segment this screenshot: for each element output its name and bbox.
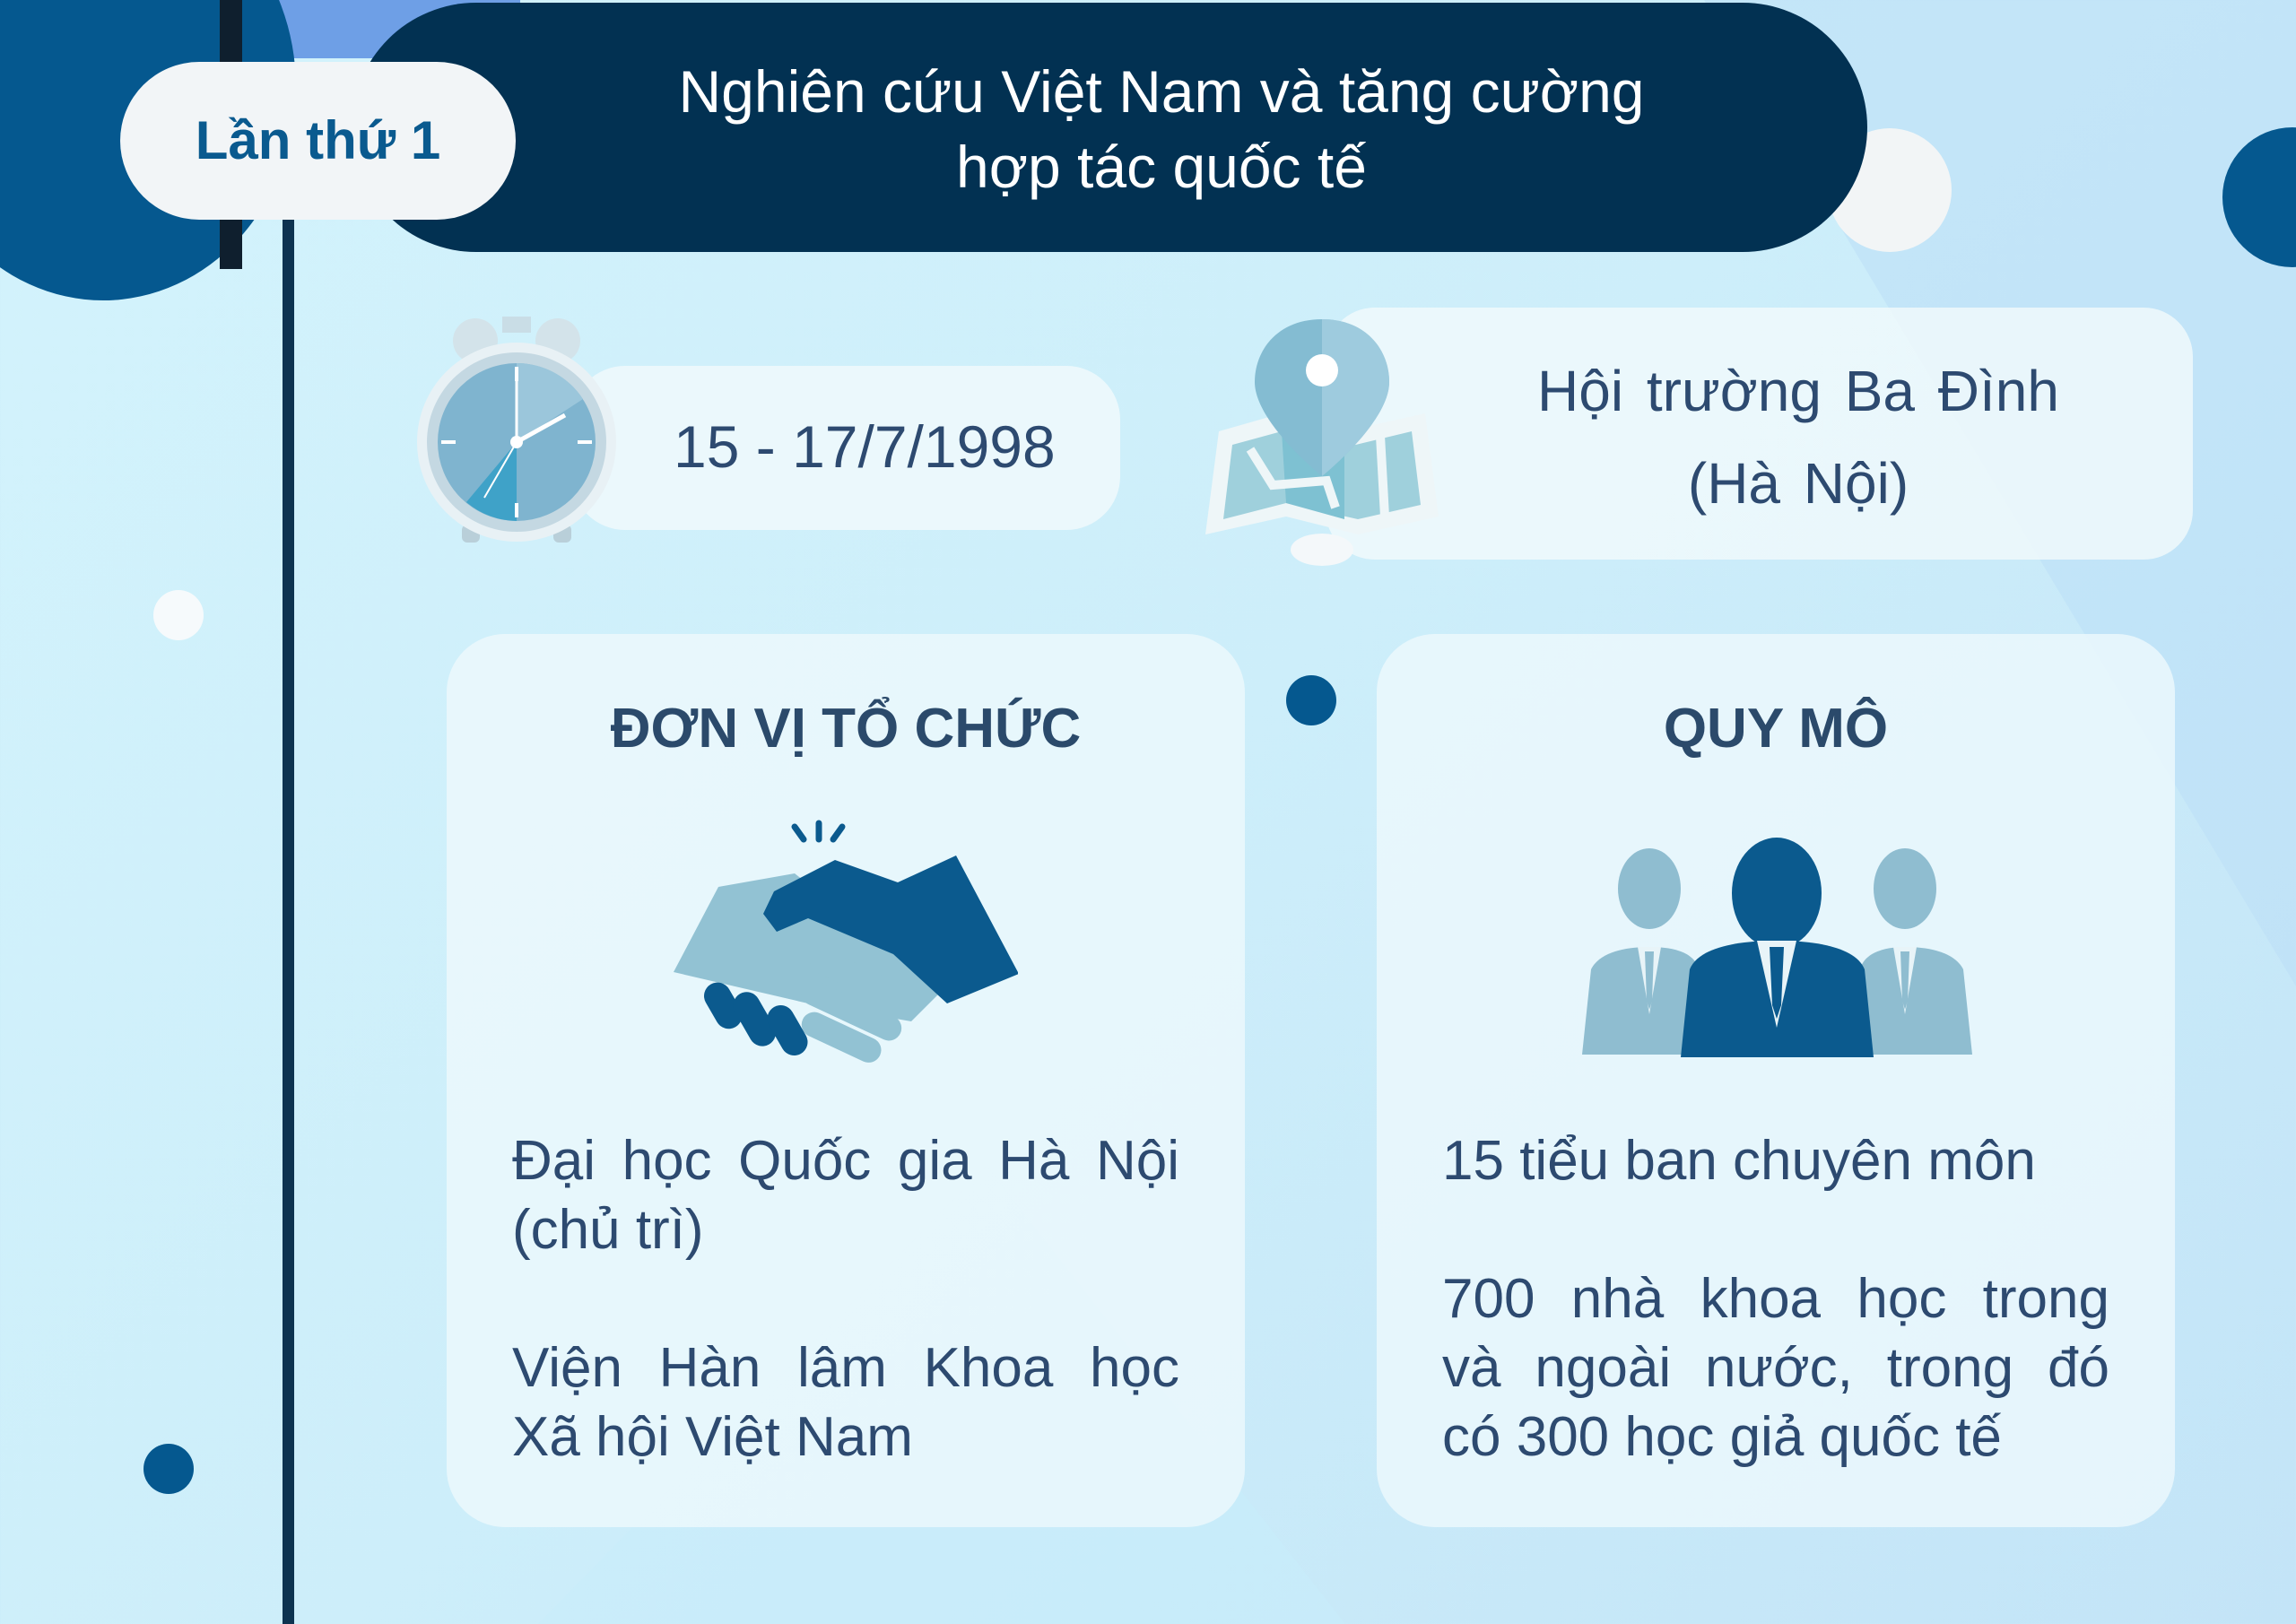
panel: organizing units <box>447 634 1245 1527</box>
heading: ĐƠN VỊ TỔ CHỨC: ĐƠN VỊ TỔ CHỨC <box>611 698 1081 760</box>
location text: Hội trường Ba Đình <box>1537 359 2059 423</box>
title text: Nghiên cứu Việt Nam và tăng cường <box>678 58 1644 125</box>
date text: 15 - 17/7/1998 <box>674 413 1056 480</box>
text: organizers: Đại học Quốc gia Hà Nội <box>512 1130 1179 1192</box>
title bar <box>352 3 1867 252</box>
heading: QUY MÔ: QUY MÔ <box>1664 698 1888 760</box>
text: scale details: 700 nhà khoa học trong <box>1442 1268 2109 1330</box>
location text <box>1537 359 2059 516</box>
icon: map pin <box>1205 319 1421 566</box>
icon: handshake <box>674 820 1018 1063</box>
decorative dots <box>153 590 204 640</box>
title text: hợp tác quốc tế <box>956 134 1367 200</box>
top-left corner shapes <box>0 0 520 300</box>
title text <box>678 58 1644 200</box>
text: scale details <box>1442 1130 2109 1468</box>
text: scale details: có 300 học giả quốc tế <box>1442 1406 2002 1468</box>
text: organizers: Viện Hàn lâm Khoa học <box>512 1337 1179 1399</box>
text: scale details: 15 tiểu ban chuyên môn <box>1442 1130 2036 1192</box>
text: organizers: Xã hội Việt Nam <box>512 1406 913 1468</box>
date pill <box>571 366 1120 530</box>
badge: Lần thứ 1: Lần thứ 1 <box>196 110 440 170</box>
text: scale details: và ngoài nước, trong đó <box>1442 1337 2109 1399</box>
location pill <box>1326 308 2193 560</box>
badge: Lần thứ 1 <box>120 62 516 220</box>
text: organizers <box>512 1130 1179 1468</box>
panel: scale <box>1377 634 2175 1527</box>
text: organizers: (chủ trì) <box>512 1199 704 1261</box>
timeline vertical line <box>283 215 294 1624</box>
icon: people <box>1582 838 1972 1057</box>
location text: (Hà Nội) <box>1688 451 1909 516</box>
icon: clock <box>417 317 606 543</box>
